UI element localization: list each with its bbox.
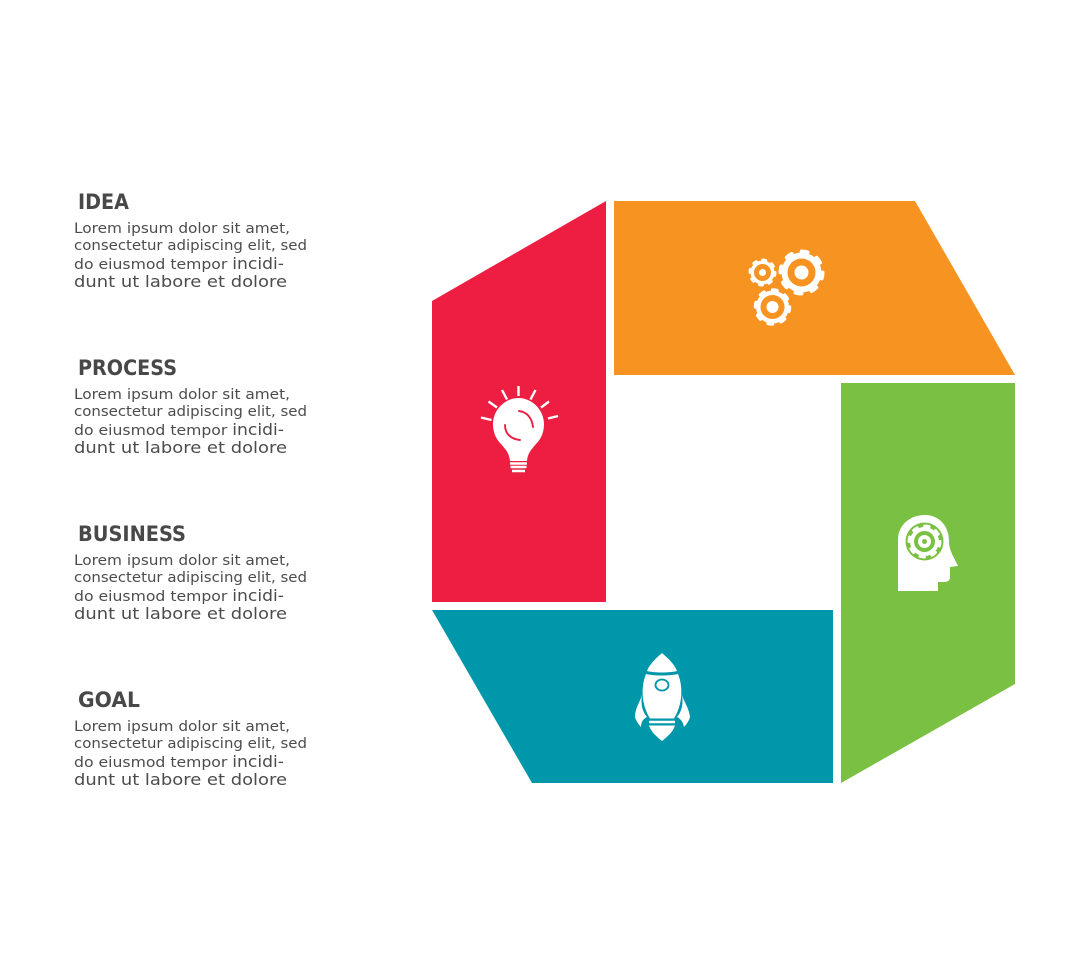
- text block: process: [74, 356, 307, 457]
- body text: idea: consectetur adipiscing elit, sed: [74, 237, 307, 254]
- body text: goal: [74, 718, 307, 789]
- text block: business: [74, 522, 307, 623]
- text block: idea: [74, 190, 307, 291]
- body text: idea: Lorem ipsum dolor sit amet,: [74, 220, 290, 237]
- body text: process: consectetur adipiscing elit, sed: [74, 403, 307, 420]
- body text: goal: do eiusmod tempor incidi-: [74, 752, 284, 771]
- panel: orange segment: [614, 201, 1015, 375]
- body text: business: [74, 552, 307, 623]
- body text: business: do eiusmod tempor incidi-: [74, 586, 284, 605]
- body text: process: [74, 386, 307, 457]
- body text: process: dunt ut labore et dolore: [74, 438, 287, 457]
- body text: idea: do eiusmod tempor incidi-: [74, 254, 284, 273]
- body text: process: Lorem ipsum dolor sit amet,: [74, 386, 290, 403]
- icon: rocket: [635, 653, 690, 741]
- body text: goal: consectetur adipiscing elit, sed: [74, 735, 307, 752]
- body text: business: consectetur adipiscing elit, sed: [74, 569, 307, 586]
- heading: idea: IDEA: [78, 190, 130, 214]
- body text: business: Lorem ipsum dolor sit amet,: [74, 552, 290, 569]
- heading: business: BUSINESS: [78, 522, 186, 546]
- heading: process: PROCESS: [78, 356, 177, 380]
- panel: green segment: [841, 383, 1015, 783]
- panel: red segment: [432, 201, 606, 602]
- icon: head with gear: [898, 515, 958, 591]
- heading: goal: GOAL: [78, 688, 140, 712]
- icon: gears: [750, 252, 822, 324]
- body text: goal: Lorem ipsum dolor sit amet,: [74, 718, 290, 735]
- text block: goal: [74, 688, 307, 789]
- body text: idea: [74, 220, 307, 291]
- panel: teal segment: [432, 610, 833, 783]
- body text: goal: dunt ut labore et dolore: [74, 770, 287, 789]
- body text: process: do eiusmod tempor incidi-: [74, 420, 284, 439]
- icon: light bulb: [481, 386, 558, 471]
- body text: idea: dunt ut labore et dolore: [74, 272, 287, 291]
- body text: business: dunt ut labore et dolore: [74, 604, 287, 623]
